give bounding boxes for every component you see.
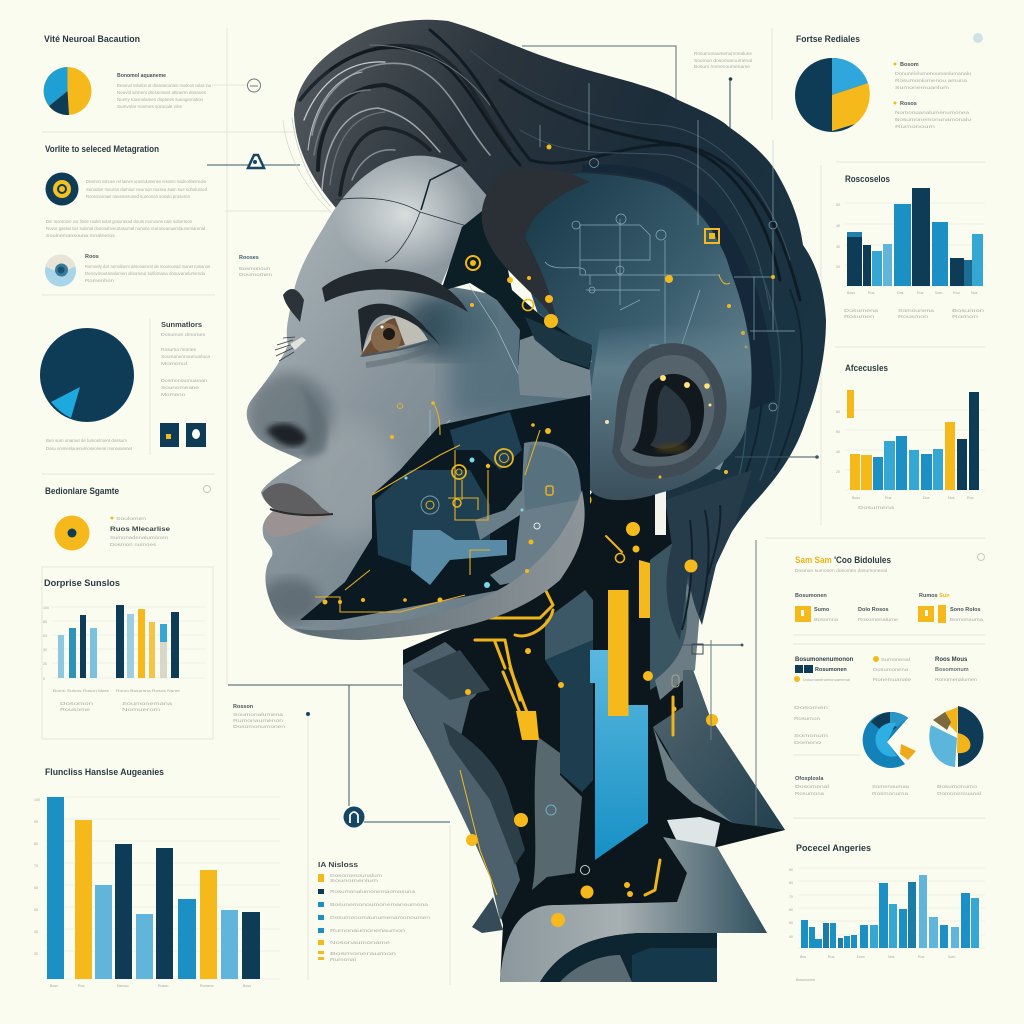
gold ring xyxy=(616,554,624,562)
description text: Roos xyxy=(85,254,99,260)
legend text: Bonomol aquaneme xyxy=(117,73,166,79)
axis and caption text: 20 xyxy=(836,265,840,269)
axis labels: 70 xyxy=(789,895,793,899)
ear xyxy=(605,343,728,479)
text: Dosmon numoes xyxy=(110,542,156,547)
head: brain cavity xyxy=(505,83,795,470)
panel: right top pie xyxy=(795,33,983,132)
bullet list: Rumonal xyxy=(330,957,356,962)
legend row: Bosomonum xyxy=(935,667,969,673)
axis and caption text: Rosumen xyxy=(844,314,875,319)
note text: Rosson xyxy=(233,704,254,710)
upper teal plate xyxy=(545,590,593,660)
axis and caption text: 100 xyxy=(43,606,49,610)
status circle xyxy=(973,33,983,43)
axis and caption text: Rus xyxy=(885,496,892,500)
legend text: Sumonemuanlum xyxy=(895,85,950,90)
axis and caption text: Roo xyxy=(953,291,960,295)
bars xyxy=(801,875,979,948)
bullet list: Sounomenlum xyxy=(330,878,379,883)
grid xyxy=(52,607,205,678)
stat items: Dolo Rosos xyxy=(858,607,889,613)
nostril and nose shade xyxy=(266,424,308,446)
legend text: Sumvolar nonmes soracale vine xyxy=(117,104,183,109)
legend row: Roos Mous xyxy=(935,657,968,663)
small neck icons xyxy=(546,644,703,874)
axis labels: 50 xyxy=(34,908,38,912)
bullet list xyxy=(318,862,431,962)
white highlight block xyxy=(655,490,666,535)
description text: Romenhon xyxy=(85,278,115,283)
axis labels: Dom xyxy=(857,955,865,959)
long teal plate xyxy=(545,640,593,792)
side text: Rosumon xyxy=(794,716,821,721)
head: side base under ear xyxy=(585,324,752,500)
axis labels: Rus xyxy=(828,955,835,959)
icon: navy yellow badge xyxy=(46,172,78,206)
axis labels: 80 xyxy=(789,881,793,885)
bullet list: Dosumenomaunumenamonoumen xyxy=(330,915,431,920)
axis and caption text: Rus xyxy=(917,291,924,295)
grid xyxy=(845,203,985,286)
axis and caption text: 20 xyxy=(43,662,47,666)
side label xyxy=(239,255,273,277)
panel: right bar chart two xyxy=(836,363,985,510)
text: Soulomen xyxy=(116,516,147,521)
axis and caption text: Nomuerom xyxy=(122,707,161,712)
side text xyxy=(794,705,829,745)
white collar piece xyxy=(667,817,720,872)
footer text xyxy=(795,776,981,796)
panel: large bar chart xyxy=(34,767,280,988)
teal circuit panel xyxy=(300,395,590,620)
axis and caption text: Ros xyxy=(967,496,974,500)
axis and caption text: Romon xyxy=(952,314,979,319)
connector lines xyxy=(228,685,450,822)
axis labels: Namoo xyxy=(117,984,129,988)
axis labels: Nos xyxy=(888,955,895,959)
eyebrow right xyxy=(322,269,468,312)
panel: right summary xyxy=(794,554,984,796)
pie chart xyxy=(44,67,92,115)
bullet list: Bosmoneraumon xyxy=(330,951,397,956)
hair strands xyxy=(283,30,802,550)
legend row: Dosumanenamonuamenal xyxy=(803,678,850,682)
heading: Sam Sam 'Coo Bidolules xyxy=(795,555,891,565)
side label: Bosmonoun xyxy=(239,266,271,271)
yellow neck traces xyxy=(475,536,673,895)
blue and yellow blocks xyxy=(590,560,650,860)
gold dots xyxy=(322,401,551,604)
axis labels: 40 xyxy=(789,935,793,939)
axis labels: Ruo xyxy=(78,984,85,988)
panel: vital overview xyxy=(44,34,260,115)
legend text: Neuvol sinnent dressonant altinerm dosanes xyxy=(117,90,206,95)
description text xyxy=(86,179,208,199)
axis and caption text: 30 xyxy=(836,245,840,249)
description text: Denovmoutanalumen dinomeur sullomana dosuvanelumenda xyxy=(85,271,206,276)
large pie chart xyxy=(40,328,134,422)
icon: gradient lens xyxy=(45,254,76,286)
legend text: Bevonal nolution at dreamecamen modeos calas ina xyxy=(117,83,212,88)
heading: Bedionlare Sgamte xyxy=(45,486,119,496)
note text: Rumonaumenon xyxy=(233,718,284,723)
stat items: Bomonauma xyxy=(950,617,984,622)
hanging hair strands xyxy=(665,470,752,640)
axis and caption text: 0 xyxy=(43,677,45,681)
side label: Rooses xyxy=(239,255,259,261)
heading: Vité Neuroal Bacaution xyxy=(44,34,140,44)
legend text: Nomonuanalumenumonea xyxy=(895,110,970,115)
bars xyxy=(58,605,179,678)
panel: center notes xyxy=(228,685,450,962)
legend text xyxy=(117,73,212,109)
eyebrow left xyxy=(283,289,304,322)
bars xyxy=(47,797,260,979)
axis labels xyxy=(789,868,955,982)
bullet list: Nosonaumoname xyxy=(330,940,391,945)
neck left fin xyxy=(472,897,503,933)
note text: Soumonalumena xyxy=(233,712,284,717)
summary text: Soumanennoumunlaca xyxy=(161,354,211,359)
pie chart xyxy=(795,58,870,132)
description text: Ruvor gassel tier sulonal dosonahveurtasumal nunone reuroneanuemlaunemarenal xyxy=(46,226,205,231)
summary text: Sounomeane xyxy=(161,385,200,390)
axis labels xyxy=(34,798,251,988)
axis and caption text: 60 xyxy=(836,430,840,434)
legend text: Bosom xyxy=(900,62,919,68)
axis and caption text: Nos xyxy=(948,496,955,500)
legend row: Bosumonenumonon xyxy=(795,657,854,663)
axis and caption text: Dos xyxy=(897,291,904,295)
description text: Romonvinael navemeruned sumonon sosulo proseron xyxy=(86,194,191,199)
summary text: Sunmatlors xyxy=(161,322,202,329)
axis and caption text: 40 xyxy=(836,224,840,228)
axis and caption text xyxy=(43,606,180,712)
axis labels: Ruson xyxy=(158,984,168,988)
summary text: Dosmonoumuaman xyxy=(161,378,208,383)
axis and caption text: Bosumon xyxy=(952,308,985,313)
legend row: Rosumonen xyxy=(815,667,847,673)
side text: Somonum xyxy=(794,733,829,738)
description text xyxy=(46,219,205,238)
summary text: Rosuma momes xyxy=(161,347,196,352)
description text xyxy=(85,254,210,283)
description text: Soulnemansouna ronalneros xyxy=(46,233,115,238)
bullet list: IA Nisloss xyxy=(318,862,358,869)
text: Sumonadenalumonen xyxy=(110,535,169,540)
left eye lashes xyxy=(275,337,295,361)
icon: yellow disc xyxy=(54,516,90,550)
forehead seams xyxy=(335,198,480,262)
panel: bedionlare xyxy=(45,486,210,550)
head: hair back mass xyxy=(283,20,826,620)
axis and caption text: 80 xyxy=(836,410,840,414)
teal circuit plates xyxy=(375,412,522,570)
yellow neck block xyxy=(516,711,539,740)
axis labels: 70 xyxy=(34,864,38,868)
light blue plate xyxy=(411,530,507,585)
axis labels: Bosn xyxy=(50,984,58,988)
side gray plate xyxy=(518,333,592,400)
description text: Din monrome vor linde raulet sulat gosunerad doum monvone cale sobertuon xyxy=(46,219,193,224)
bars xyxy=(847,188,983,286)
axis and caption text: Boss xyxy=(847,291,855,295)
note text: Dosumonumonen xyxy=(233,724,286,729)
description text: Romovily dos rumolinent dosonament de mourounad manet rumanos xyxy=(85,264,210,269)
neck dark base xyxy=(403,480,785,982)
axis and caption text: Dosumena xyxy=(844,308,879,313)
stat items: Sono Rolos xyxy=(950,607,981,613)
axis labels: Ros xyxy=(918,955,925,959)
donut chart left xyxy=(863,712,916,768)
summary text: Dosumon dmomes xyxy=(161,332,205,337)
axis and caption text xyxy=(836,410,974,510)
panel: summary pie xyxy=(40,318,211,455)
side text: Domeno xyxy=(794,740,822,745)
axis and caption text xyxy=(836,203,985,319)
small status circle xyxy=(204,486,210,492)
head: face xyxy=(247,156,600,640)
gray column xyxy=(532,737,582,890)
legend text: Rosos xyxy=(900,101,917,107)
stat items: Rumos Sun xyxy=(919,593,950,599)
legend text: Rumonoum xyxy=(895,124,936,129)
legend text: Rosumonlumenou amuna xyxy=(895,78,968,83)
caption text xyxy=(46,438,133,451)
top note and connector lines: Bosum nomenoumename xyxy=(694,64,751,69)
bars xyxy=(847,390,979,490)
footer text: Rosmonuma xyxy=(872,791,909,796)
axis and caption text: Nos xyxy=(971,291,978,295)
divider xyxy=(149,318,151,455)
neck left plates xyxy=(403,642,520,920)
dark hair edge around cavity xyxy=(582,164,775,410)
legend row: Ronemuanale xyxy=(873,677,912,682)
axis and caption text: 50 xyxy=(836,203,840,207)
axis and caption text: Boss xyxy=(852,496,860,500)
axis labels: 60 xyxy=(789,908,793,912)
gold traces xyxy=(315,402,540,612)
icon: two navy squares xyxy=(160,423,206,447)
footer text: Rosumona xyxy=(795,791,825,796)
footer text: Somenoumaa xyxy=(872,784,910,789)
top note and connector lines: Rosumonaumenumonalune xyxy=(694,51,753,56)
heading: Pocecel Angeries xyxy=(796,843,871,853)
footer text: Bosumonumo xyxy=(937,784,978,789)
grid xyxy=(798,868,985,948)
caption text: Dosu ommenlauenumoneoneral monouanmet xyxy=(46,446,133,451)
axis labels: 80 xyxy=(34,842,38,846)
axis and caption text: 80 xyxy=(43,620,47,624)
text: Ruos Mlecarlise xyxy=(110,526,170,533)
description text: Desmon sohuen ret lamen uranndumenen resomo modeolinemedio xyxy=(86,179,207,184)
side label: Dournomen xyxy=(239,272,273,277)
front hair lock xyxy=(482,168,590,328)
axis labels: 50 xyxy=(789,921,793,925)
bullet list: Dosomenounalum xyxy=(330,873,383,878)
legend text: Bosumonemonunamonalu xyxy=(895,117,972,122)
heading: Fluncliss Hanslse Augeanies xyxy=(45,767,164,777)
icon: warning connector xyxy=(207,155,300,168)
bullet list: Rosumonalumonemaomasuna xyxy=(330,889,416,894)
neural circuit lines xyxy=(540,83,795,411)
footer text: Ofoxplosla xyxy=(795,776,824,782)
bullet list: Bosunemonoumonemanoumona xyxy=(330,902,429,907)
heading: Roscoselos xyxy=(845,174,890,184)
legend row xyxy=(794,656,978,682)
axis and caption text: Dos xyxy=(923,496,930,500)
legend row: Ronomenalumen xyxy=(935,677,978,682)
axis and caption text: 60 xyxy=(43,634,47,638)
stat items xyxy=(795,593,984,623)
axis labels: 90 xyxy=(34,820,38,824)
axis labels: 100 xyxy=(34,798,40,802)
legend row: Sumonenal xyxy=(881,657,910,662)
grid xyxy=(45,797,280,979)
facial shading xyxy=(248,157,600,622)
icon: connector circle xyxy=(212,79,260,92)
stat items: Bosomna xyxy=(814,617,839,622)
icon: ring marker xyxy=(344,806,364,828)
collar inner xyxy=(540,933,717,982)
description text: Sunodan mouran damour neuroon rausea susn sue sohulumed xyxy=(86,187,208,192)
axis and caption text: Rousmon xyxy=(898,314,929,319)
gray jaw lobe xyxy=(475,441,581,585)
white ring icon xyxy=(534,523,540,529)
summary text: Momeno xyxy=(161,392,186,397)
eye xyxy=(358,304,440,365)
top note and connector lines: Soumon dosomanoumenal xyxy=(694,58,752,63)
head: neck mechanics xyxy=(403,455,819,982)
axis labels: 90 xyxy=(789,868,793,872)
side text: Dosomen xyxy=(794,705,829,710)
heading: Fortse Rediales xyxy=(796,34,860,44)
axis and caption text: Rus xyxy=(868,291,875,295)
callout arrow xyxy=(672,644,742,646)
text xyxy=(110,516,170,547)
panel: selected integration xyxy=(45,144,300,286)
yellow dots xyxy=(465,494,718,927)
panel: right bar chart one xyxy=(836,174,985,319)
axis and caption text: Bomn Sulons Rosun Mare xyxy=(53,689,109,693)
axis labels: Bosumonen xyxy=(796,978,815,982)
caption text: Ben sum unamet de lumoelment dossum xyxy=(46,438,128,443)
heading: Afcecusles xyxy=(845,363,888,373)
axis and caption text: Dosumena xyxy=(858,505,895,510)
stat items: Rosomenalume xyxy=(858,617,899,622)
axis labels: 30 xyxy=(34,952,38,956)
axis and caption text: Dosomon xyxy=(60,701,94,706)
legend text xyxy=(894,62,972,129)
summary text xyxy=(161,322,211,397)
axis labels: Rumeno xyxy=(200,984,214,988)
legend text: Donunmelumenoumanlumanalu xyxy=(895,71,972,76)
panel: small bar chart xyxy=(43,578,205,712)
bullet list: Rumonaumonenaumon xyxy=(330,928,406,933)
axis and caption text: 40 xyxy=(43,648,47,652)
axis labels: 60 xyxy=(34,886,38,890)
circuit ring icons xyxy=(398,404,553,514)
yellow markers in cavity xyxy=(546,144,775,348)
inner wing arc xyxy=(653,727,733,823)
stat items: Sumo xyxy=(814,607,830,613)
cheek seam xyxy=(430,285,592,440)
axis and caption text: Rousome xyxy=(60,707,91,712)
donut chart right xyxy=(929,706,983,767)
panel: right summary: Dosmon sumonen dosomen dosumonenal xyxy=(795,568,887,573)
small eye white xyxy=(290,337,306,350)
axis and caption text: Rumo Bosumna Rosos Nume xyxy=(116,689,180,693)
lips xyxy=(262,483,333,537)
footer text: Dosomenal xyxy=(795,784,829,789)
axis and caption text: Som xyxy=(935,291,942,295)
right neck panel xyxy=(650,530,700,690)
summary text: Momonul xyxy=(161,361,187,366)
axis and caption text: 20 xyxy=(836,470,840,474)
axis and caption text: Somounena xyxy=(898,308,935,313)
axis labels: Som xyxy=(948,955,955,959)
blue glow nodes xyxy=(404,458,524,588)
grid xyxy=(845,410,985,490)
top note and connector lines xyxy=(522,46,753,130)
heading: Vorlite to seleced Metagration xyxy=(45,144,159,154)
legend row: Dosumonena xyxy=(873,667,909,672)
axis labels: Boss xyxy=(243,984,251,988)
axis labels: Bos xyxy=(800,955,806,959)
right wing plate xyxy=(653,670,785,830)
status circle xyxy=(978,554,984,560)
axis and caption text: Soumonemana xyxy=(122,701,173,706)
collar xyxy=(500,837,767,982)
yellow side icons xyxy=(466,256,558,328)
footer text: Domonemuanal xyxy=(937,791,981,796)
panel: bottom right chart xyxy=(789,843,985,982)
chin jaw band xyxy=(294,490,585,640)
axis and caption text: 40 xyxy=(836,450,840,454)
note text xyxy=(233,704,310,729)
side dark panel xyxy=(441,207,592,373)
legend text: Nueny roovnolamen dopanes sunagernation xyxy=(117,97,204,102)
heading: Dorprise Sunslos xyxy=(44,578,120,588)
stat items: Bosumonen xyxy=(795,593,827,599)
axis labels: 40 xyxy=(34,930,38,934)
